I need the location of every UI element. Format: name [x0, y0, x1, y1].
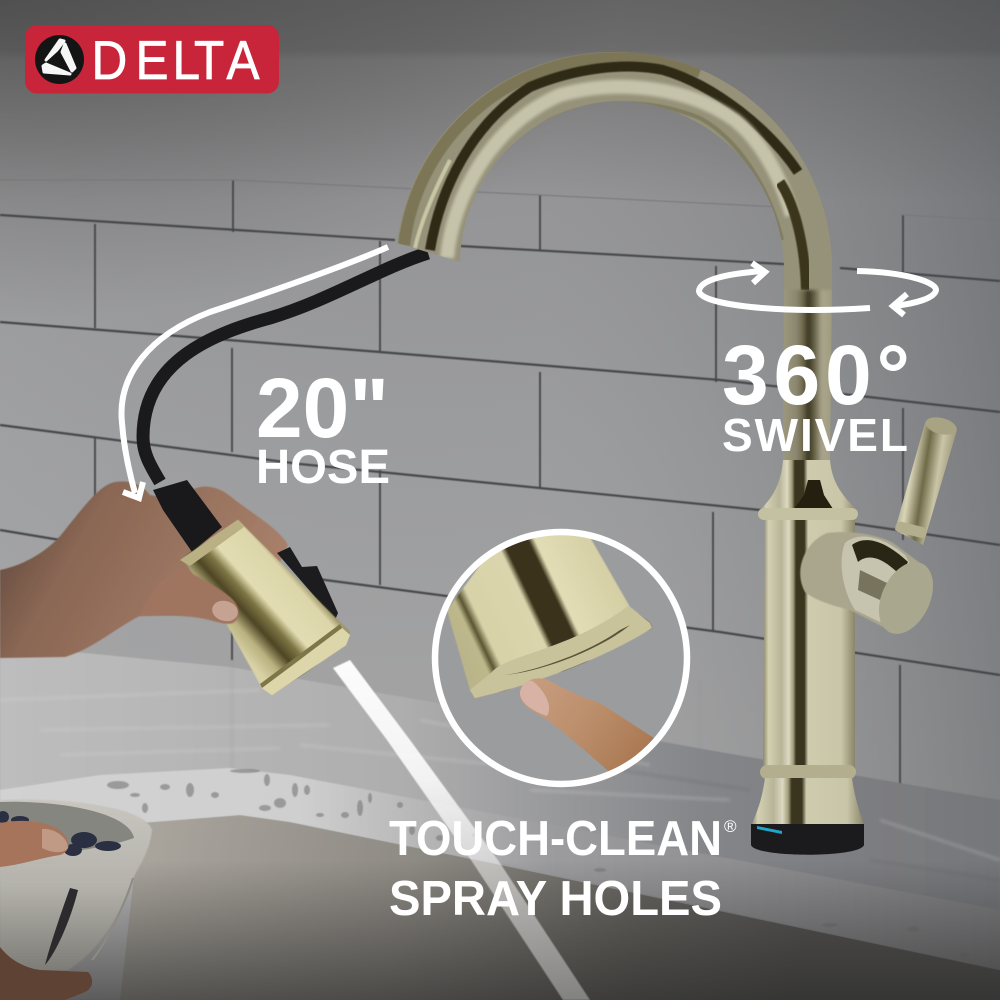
collar [760, 460, 857, 510]
faucet [397, 52, 958, 855]
lever handle [895, 423, 957, 545]
black base [751, 824, 864, 855]
bottom vignette [0, 860, 1000, 1000]
marble sink edge [0, 768, 1000, 970]
logo: Delta [25, 25, 279, 94]
spray hose [143, 253, 428, 482]
fingertip close-up [520, 678, 654, 771]
hand holding bowl [0, 821, 92, 1000]
text: touch-clean spray holes: ® [724, 817, 737, 836]
thumb over sprayer [140, 568, 240, 624]
hand holding sprayer [0, 482, 288, 658]
handle hub [800, 532, 920, 633]
text: 20 inch hose: 20" [256, 361, 389, 455]
sprayer rim [470, 606, 652, 698]
water stream [333, 660, 590, 1000]
base flare [751, 778, 864, 826]
text: 360 swivel: SWIVEL [722, 409, 908, 461]
sink basin [120, 815, 1000, 1000]
faucet spout arc [397, 52, 832, 465]
base ring [760, 765, 856, 779]
thumbnail [210, 598, 240, 624]
arrow: hose length [122, 247, 388, 498]
countertop [0, 645, 1000, 1000]
touch indicator light [757, 826, 782, 834]
hub chrome section [842, 537, 912, 622]
lever cap [924, 414, 958, 438]
bowl with blueberries [0, 799, 152, 972]
text: 20 inch hose: HOSE [256, 441, 390, 494]
sprayer head [153, 480, 350, 695]
text: 360 swivel: 360° [722, 328, 910, 422]
arrows: swivel rotation [699, 263, 936, 315]
fingernail [520, 680, 549, 716]
sprayer close-up [447, 525, 652, 698]
faucet body [763, 520, 855, 772]
callout: touch-clean spray holes detail [435, 525, 687, 790]
spout reflections [404, 58, 836, 470]
hub dark reflection [852, 540, 908, 575]
text: touch-clean spray holes: SPRAY HOLES [389, 872, 722, 926]
hub stripe reflections [858, 570, 887, 600]
handle cap face [868, 553, 944, 643]
text: touch-clean spray holes [389, 812, 737, 926]
collar ring [758, 508, 858, 520]
logo: Delta: DELTA [92, 31, 260, 92]
text: touch-clean spray holes: TOUCH-CLEAN [389, 812, 722, 866]
collar dark reflection [792, 480, 835, 512]
lever ring [894, 521, 928, 539]
